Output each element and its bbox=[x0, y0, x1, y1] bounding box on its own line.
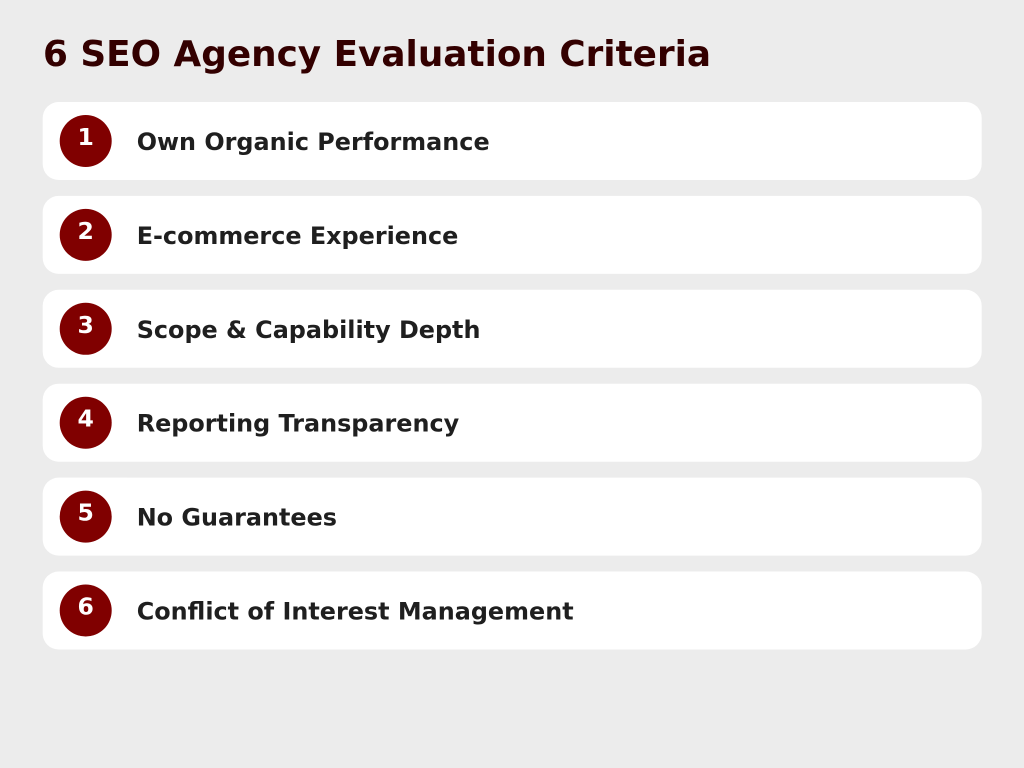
number badge 3: 3 bbox=[78, 311, 94, 339]
title: 6 SEO Agency Evaluation Criteria bbox=[43, 34, 711, 75]
number badge 4 bbox=[60, 397, 112, 449]
number badge 3 bbox=[60, 303, 112, 355]
number badge 5: 5 bbox=[78, 499, 94, 527]
number badge 2: 2 bbox=[78, 217, 94, 245]
panel: criterion 3 bbox=[43, 290, 982, 368]
label 1: Own Organic Performance bbox=[137, 128, 490, 156]
number badge 2 bbox=[60, 209, 112, 261]
panel: criterion 1 bbox=[43, 102, 982, 180]
number badge 1 bbox=[60, 115, 112, 167]
label 4: Reporting Transparency bbox=[137, 410, 459, 438]
panel: criterion 5 bbox=[43, 478, 982, 556]
number badge 6: 6 bbox=[78, 592, 94, 620]
number badge 5 bbox=[60, 491, 112, 543]
number badge 1: 1 bbox=[78, 123, 94, 151]
number badge 6 bbox=[60, 584, 112, 636]
panel: criterion 2 bbox=[43, 196, 982, 274]
label 5: No Guarantees bbox=[137, 504, 337, 532]
number badge 4: 4 bbox=[78, 405, 94, 433]
label 3: Scope & Capability Depth bbox=[137, 316, 480, 344]
label 2: E-commerce Experience bbox=[137, 222, 458, 250]
panel: criterion 6 bbox=[43, 572, 982, 650]
label 6: Conflict of Interest Management bbox=[137, 598, 574, 626]
panel: criterion 4 bbox=[43, 384, 982, 462]
